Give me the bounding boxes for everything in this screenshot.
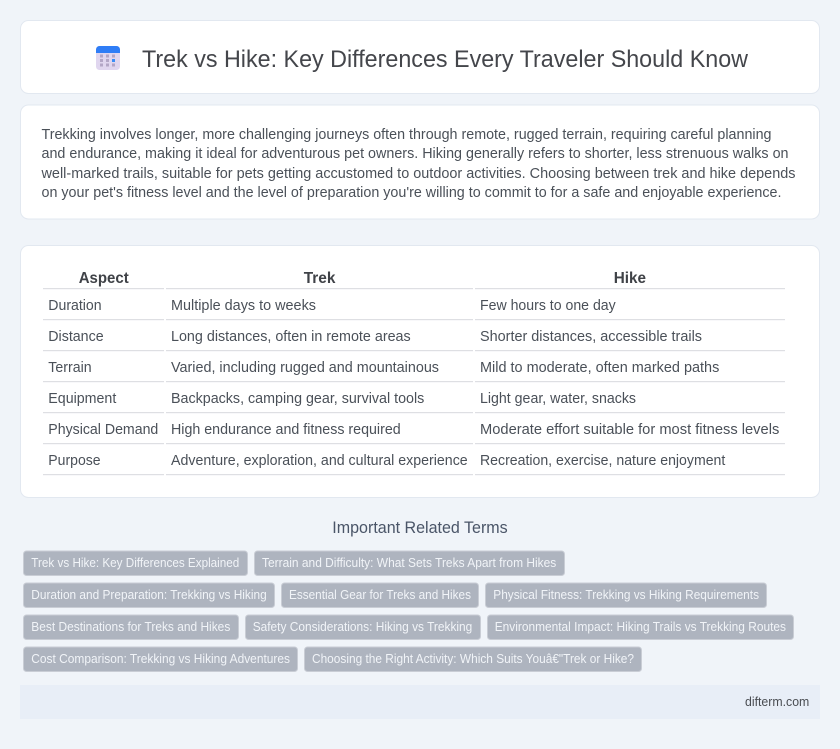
chip xyxy=(488,615,794,640)
table header row: Aspect xyxy=(79,270,129,287)
chip xyxy=(486,583,766,608)
chip xyxy=(24,583,274,608)
chip xyxy=(282,583,478,608)
panel: header xyxy=(20,20,820,94)
table row: distance: Long distances, often in remote areas xyxy=(171,329,411,345)
text block: introduction paragraph: Trekking involves longer, more challenging journeys often through remote, rugged terrain, requiring careful planning xyxy=(42,127,772,143)
chip: Duration and Preparation: Trekking vs Hiking xyxy=(31,588,267,602)
table row: duration: Multiple days to weeks xyxy=(171,298,316,314)
table header row: Trek xyxy=(304,270,336,287)
chip xyxy=(24,551,248,576)
table header row xyxy=(79,270,646,287)
text block: introduction paragraph xyxy=(41,127,796,201)
chip: Environmental Impact: Hiking Trails vs Trekking Routes xyxy=(495,620,786,634)
chip xyxy=(304,647,642,672)
chip xyxy=(24,615,238,640)
table row: purpose: Purpose xyxy=(48,453,101,469)
chip: Trek vs Hike: Key Differences Explained xyxy=(31,556,239,570)
table row: equipment xyxy=(48,391,636,407)
table row: duration: Few hours to one day xyxy=(480,298,616,314)
table row: purpose xyxy=(48,453,725,469)
table header row: Hike xyxy=(614,270,646,287)
table row: equipment: Light gear, water, snacks xyxy=(480,391,636,407)
panel: introduction xyxy=(20,105,820,219)
chip: Terrain and Difficulty: What Sets Treks Apart from Hikes xyxy=(262,556,556,570)
chip xyxy=(246,615,480,640)
chip: Choosing the Right Activity: Which Suits Youâ€"Trek or Hike? xyxy=(312,652,634,666)
panel: comparison table xyxy=(20,246,820,498)
table row: terrain: Varied, including rugged and mountainous xyxy=(171,360,439,376)
panel: related term chips xyxy=(24,551,794,672)
title: Trek vs Hike: Key Differences Every Traveler Should Know xyxy=(142,46,748,73)
chip: Best Destinations for Treks and Hikes xyxy=(31,620,230,634)
table row: terrain: Mild to moderate, often marked paths xyxy=(480,360,719,376)
text block: introduction paragraph: well-marked trails, suitable for pets getting accustomed to outdoor activities. Choosing between trek and hike depends xyxy=(41,166,796,182)
chip xyxy=(254,551,564,576)
table row: duration xyxy=(48,298,616,314)
chip: Essential Gear for Treks and Hikes xyxy=(289,588,471,602)
table row: physical demand: Physical Demand xyxy=(48,422,158,438)
chip: Cost Comparison: Trekking vs Hiking Adventures xyxy=(31,652,290,666)
table row: distance: Distance xyxy=(48,329,104,345)
table row: terrain xyxy=(48,360,719,376)
table row: physical demand: Moderate effort suitable for most fitness levels xyxy=(480,422,779,438)
table row: equipment: Backpacks, camping gear, survival tools xyxy=(171,391,424,407)
table row: terrain: Terrain xyxy=(48,360,92,376)
heading: related terms: Important Related Terms xyxy=(332,519,508,537)
table row: equipment: Equipment xyxy=(48,391,116,407)
table row: distance xyxy=(48,329,702,345)
table row: distance: Shorter distances, accessible trails xyxy=(480,329,702,345)
footer xyxy=(20,685,820,719)
chip: Physical Fitness: Trekking vs Hiking Requirements xyxy=(493,588,759,602)
chip: Safety Considerations: Hiking vs Trekking xyxy=(253,620,472,634)
table row: duration: Duration xyxy=(48,298,102,314)
text block: introduction paragraph: on your pet's fitness level and the level of preparation you're willing to commit to for a safe and enjoyable experience. xyxy=(42,185,782,201)
table row: physical demand: High endurance and fitness required xyxy=(171,422,401,438)
table row: physical demand xyxy=(48,422,779,438)
icon: calendar xyxy=(96,46,120,70)
table row: purpose: Recreation, exercise, nature enjoyment xyxy=(480,453,725,469)
text block: introduction paragraph: and endurance, making it ideal for adventurous pet owners. Hiking generally refers to shorter, less strenuous walks on xyxy=(42,146,788,162)
chip xyxy=(24,647,298,672)
footer source text: difterm.com xyxy=(745,694,809,709)
table row: purpose: Adventure, exploration, and cultural experience xyxy=(171,453,468,469)
